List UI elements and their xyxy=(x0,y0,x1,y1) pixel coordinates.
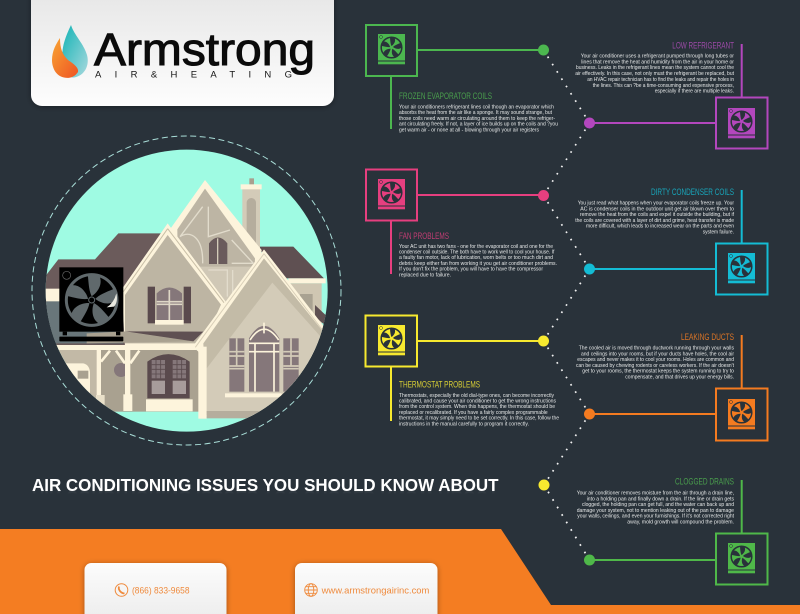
body text: into a holding pan and finally down a drain. If the line or drain gets xyxy=(587,496,734,502)
body text xyxy=(577,490,734,525)
body text: AC is condenser coils in the outdoor unit get air blown over them to xyxy=(580,206,734,212)
contact card: phone xyxy=(84,563,226,614)
body text: lines that remove the heat and humidity from the air in your home or xyxy=(581,59,734,65)
heading: FROZEN EVAPORATOR COILS xyxy=(399,90,492,101)
body text xyxy=(399,244,557,278)
icon: globe xyxy=(305,584,317,596)
body text: the lines. This can ?be a time-consuming and expensive process, xyxy=(593,83,734,89)
body text: business. Leaks in the refrigerant lines mean the system cannot cool the xyxy=(576,65,734,71)
body text: compensate, and that drives up your energy bills. xyxy=(625,374,734,380)
body text xyxy=(575,200,734,236)
panel: fan problems xyxy=(366,170,557,278)
body text: condenser coil outside. The both have to work well to cool your house. If xyxy=(399,250,555,256)
body text: replaced or recalibrated. If you have a fairly complex programmable xyxy=(399,410,548,416)
body text: Your air conditioners refrigerant lines coil though an evaporator which xyxy=(399,104,554,110)
body text: especially if there are multiple leaks. xyxy=(655,89,734,95)
icon: orange fan xyxy=(728,399,755,429)
body text: clogged, the holding pan can get full, and the water can back up and xyxy=(582,502,734,508)
body text: damage your system, not to mention leaking out of the pan to damage xyxy=(577,508,734,514)
body text: If you don't fix the problem, you will have to have the compressor xyxy=(399,267,543,273)
logo tagline: AIR&HEATING xyxy=(95,70,292,80)
body text: Your air conditioner uses a refrigerant pumped through long tubes or xyxy=(581,54,734,60)
body text: Your air conditioner removes moisture from the air through a drain line, xyxy=(577,490,734,496)
body text: air effectively. In this case, not only must the refrigerant be replaced, but xyxy=(575,71,734,77)
body text: You just read what happens when your evaporator coils freeze up. Your xyxy=(578,200,734,206)
phone number: (866) 833-9658 xyxy=(132,586,190,596)
heading: CLOGGED DRAINS xyxy=(675,476,734,486)
icon: green fan xyxy=(728,543,755,573)
body text: and ceilings into your rooms, but if your ducts have holes, the cool air xyxy=(581,351,734,357)
yellow connector dot xyxy=(538,480,550,490)
body text: escapes and never makes it to cool your rooms. Holes are common and xyxy=(577,357,734,363)
footer: orange band xyxy=(0,529,800,614)
body text: get warm air - or none at all - blowing through your air registers xyxy=(399,127,539,133)
body text: a faulty fan motor, lack of lubrication, worn belts or too much dirt and xyxy=(399,255,553,261)
body text: from the control system. When this happens, the thermostat should be xyxy=(399,404,555,410)
body text: an HVAC repair technician has to find the leaks and repair the holes in xyxy=(587,77,734,83)
dashed circle ring xyxy=(32,136,341,445)
panel: thermostat problems xyxy=(366,316,559,427)
body text: away, mold growth will compound the problem. xyxy=(627,519,734,525)
body text: system failure. xyxy=(703,230,734,236)
body text: ant circulating freely. If not, a layer of ice builds up on the coils and ?you xyxy=(399,122,558,128)
website address: www.armstrongairinc.com xyxy=(321,586,430,596)
body text: more difficult, which leads to increased wear on the parts and even xyxy=(586,224,734,230)
body text: Thermostats, especially the old dial-type ones, can become incorrectly xyxy=(399,393,554,399)
logo card xyxy=(31,0,334,106)
heading: LEAKING DUCTS xyxy=(681,331,734,342)
contact card: website xyxy=(295,563,438,614)
body text: Your AC unit has two fans - one for the evaporator coil and one for the xyxy=(399,244,553,250)
body text: The cooled air is moved through ductwork running through your walls xyxy=(579,346,734,352)
icon: phone xyxy=(115,584,128,596)
heading: FAN PROBLEMS xyxy=(399,230,449,241)
icon: purple fan xyxy=(728,108,755,138)
icon: flame logo xyxy=(52,25,88,78)
back gable xyxy=(171,180,262,302)
middle gable xyxy=(122,223,226,347)
icon: black AC unit on house xyxy=(59,267,123,341)
icon: cyan fan xyxy=(728,253,755,283)
body text: debris keep either fan from working it you get air conditioner problems. xyxy=(399,261,557,267)
body text: calibrated, and cause your air conditioner to get the wrong instructions xyxy=(399,398,556,404)
body text: thermostat, it may simply need to be set correctly. In this case, follow the xyxy=(399,416,559,422)
panel: clogged drains xyxy=(577,476,768,584)
body text: can be caused by chewing rodents or careless workers. If the air doesn't xyxy=(576,363,734,369)
heading: DIRTY CONDENSER COILS xyxy=(651,186,734,197)
illustration: house in circle xyxy=(45,150,328,432)
chimney xyxy=(241,178,262,252)
heading: LOW REFRIGERANT xyxy=(672,40,734,50)
body text xyxy=(575,54,734,95)
body text: remove the heat from the coils and expel it outside the building, but if xyxy=(580,212,734,218)
body text xyxy=(576,346,734,380)
body text: replaced due to failure. xyxy=(399,272,451,278)
logo wordmark: Armstrong xyxy=(94,24,315,75)
body text: get to your rooms, the thermostat keeps the system running to try to xyxy=(582,368,734,374)
body text: instructions in the manual carefully to program it correctly. xyxy=(399,421,529,427)
body text xyxy=(399,104,558,133)
heading: THERMOSTAT PROBLEMS xyxy=(399,378,480,390)
body text: your walls, ceilings, and even your furnishings. If it's not corrected right xyxy=(577,514,734,520)
porch xyxy=(55,331,203,413)
body text: absorbs the heat from the air like a sponge. It may sound strange, but xyxy=(399,110,552,116)
dotted connector path xyxy=(544,50,590,560)
panel: low refrigerant xyxy=(575,40,768,148)
icon: yellow fan xyxy=(378,325,405,355)
body text xyxy=(399,393,559,427)
icon: green fan xyxy=(378,34,405,64)
panel: leaking ducts xyxy=(576,331,768,440)
body text: those coils need warm air circulating around them to keep the refriger- xyxy=(399,116,555,122)
panel: frozen evaporator coils xyxy=(366,25,558,133)
body text: the coils are covered with a layer of dirt and grime, heat transfer is made xyxy=(575,218,734,224)
icon: pink fan xyxy=(378,179,405,209)
front gable xyxy=(193,249,327,419)
panel: dirty condenser coils xyxy=(575,186,768,294)
